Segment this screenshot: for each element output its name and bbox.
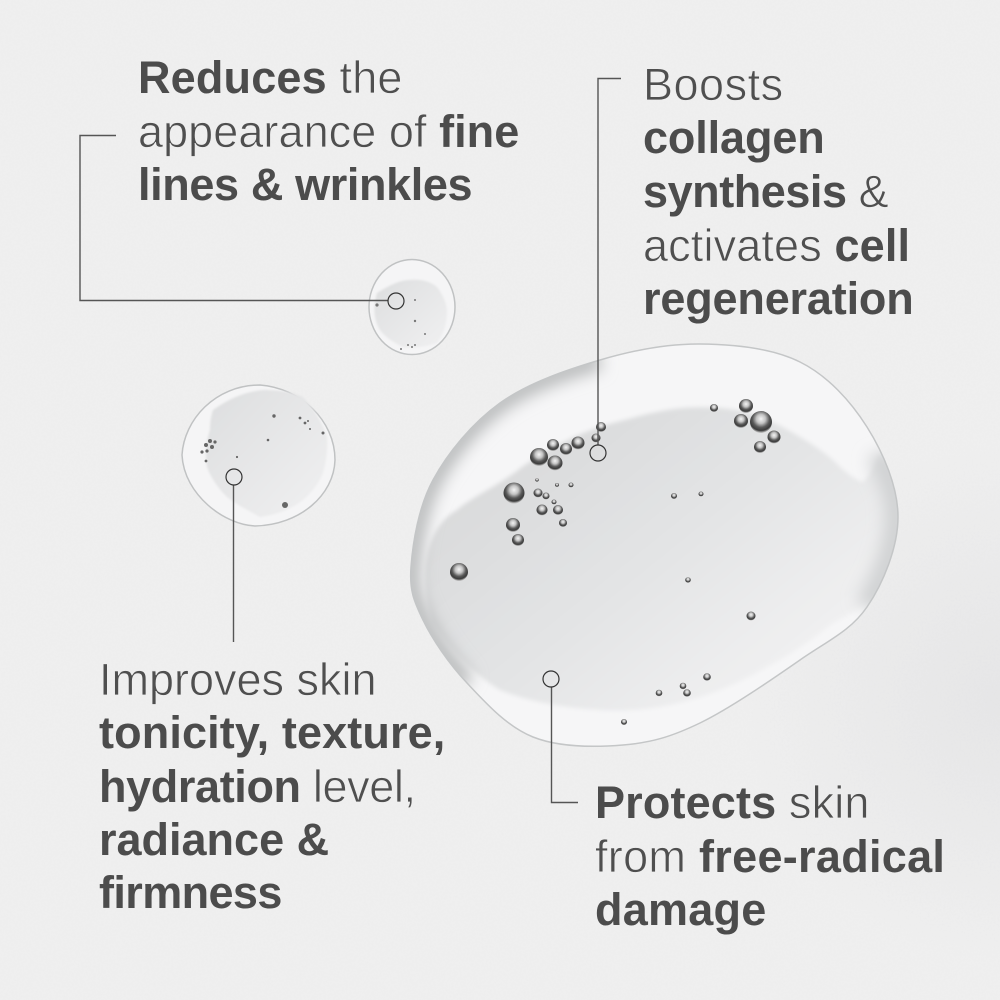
callout: tonicity: tonicity, texture, <box>99 707 445 758</box>
callout: protects: damage <box>595 884 767 935</box>
callout: collagen: activates cell <box>643 220 910 271</box>
callout: collagen: collagen <box>643 112 825 163</box>
bubbles <box>450 399 780 725</box>
small drop top <box>369 260 455 354</box>
callout: collagen: regeneration <box>643 273 914 324</box>
callout: fine lines: appearance of fine <box>138 106 519 157</box>
callout: protects <box>543 671 945 935</box>
callout: tonicity: Improves skin <box>99 654 377 705</box>
callout: fine lines <box>80 52 519 309</box>
callout: fine lines: Reduces the <box>138 52 403 103</box>
callout: tonicity: radiance & <box>99 814 329 865</box>
callout: fine lines: lines & wrinkles <box>138 159 472 210</box>
callout: protects: from free-radical <box>595 831 945 882</box>
large serum drop <box>400 335 910 755</box>
callout: collagen: synthesis & <box>643 166 889 217</box>
callout: collagen <box>590 59 914 461</box>
callout: collagen: Boosts <box>643 59 784 110</box>
medium drop left <box>182 385 335 526</box>
callout: tonicity: hydration level, <box>99 761 416 812</box>
callout: tonicity <box>99 469 445 918</box>
callout: protects: Protects skin <box>595 777 870 828</box>
callout: tonicity: firmness <box>99 867 282 918</box>
